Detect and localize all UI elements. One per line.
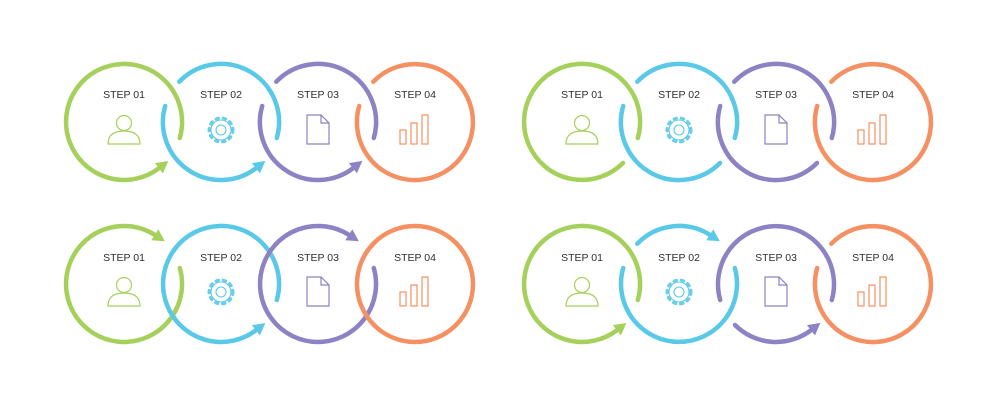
- circle: step 04 orange: [815, 226, 931, 342]
- circle: step 02 blue: [621, 64, 737, 180]
- circle: step 02 blue: STEP 02: [200, 252, 242, 264]
- circle: step 04 orange: [357, 226, 473, 342]
- circle: step 03 purple: STEP 03: [755, 252, 797, 264]
- circle: step 02 blue: STEP 02: [658, 252, 700, 264]
- panel: variant B (top-right): [524, 64, 931, 180]
- circle: step 01 green: [524, 226, 640, 342]
- circle: step 04 orange: STEP 04: [394, 89, 436, 101]
- circle: step 03 purple: [260, 226, 376, 342]
- panel: variant C (bottom-left): [66, 226, 473, 342]
- circle: step 02 blue: [621, 226, 737, 342]
- circle: step 01 green: [524, 64, 640, 180]
- circle: step 03 purple: STEP 03: [755, 89, 797, 101]
- circle: step 02 blue: STEP 02: [658, 89, 700, 101]
- circle: step 03 purple: STEP 03: [297, 252, 339, 264]
- panel: variant A (top-left): [66, 64, 473, 180]
- circle: step 04 orange: STEP 04: [852, 89, 894, 101]
- circle: step 01 green: [66, 64, 182, 180]
- circle: step 02 blue: [163, 64, 279, 180]
- circle: step 03 purple: STEP 03: [297, 89, 339, 101]
- circle: step 04 orange: STEP 04: [852, 252, 894, 264]
- circle: step 01 green: [66, 226, 182, 342]
- circle: step 01 green: STEP 01: [561, 89, 603, 101]
- circle: step 04 orange: [357, 64, 473, 180]
- circle: step 02 blue: STEP 02: [200, 89, 242, 101]
- panel: variant D (bottom-right): [524, 226, 931, 342]
- circle: step 03 purple: [718, 64, 834, 180]
- circle: step 01 green: STEP 01: [103, 89, 145, 101]
- circle: step 01 green: STEP 01: [103, 252, 145, 264]
- circle: step 02 blue: [163, 226, 279, 342]
- circle: step 01 green: STEP 01: [561, 252, 603, 264]
- circle: step 04 orange: STEP 04: [394, 252, 436, 264]
- circle: step 03 purple: [718, 226, 834, 342]
- circle: step 04 orange: [815, 64, 931, 180]
- circle: step 03 purple: [260, 64, 376, 180]
